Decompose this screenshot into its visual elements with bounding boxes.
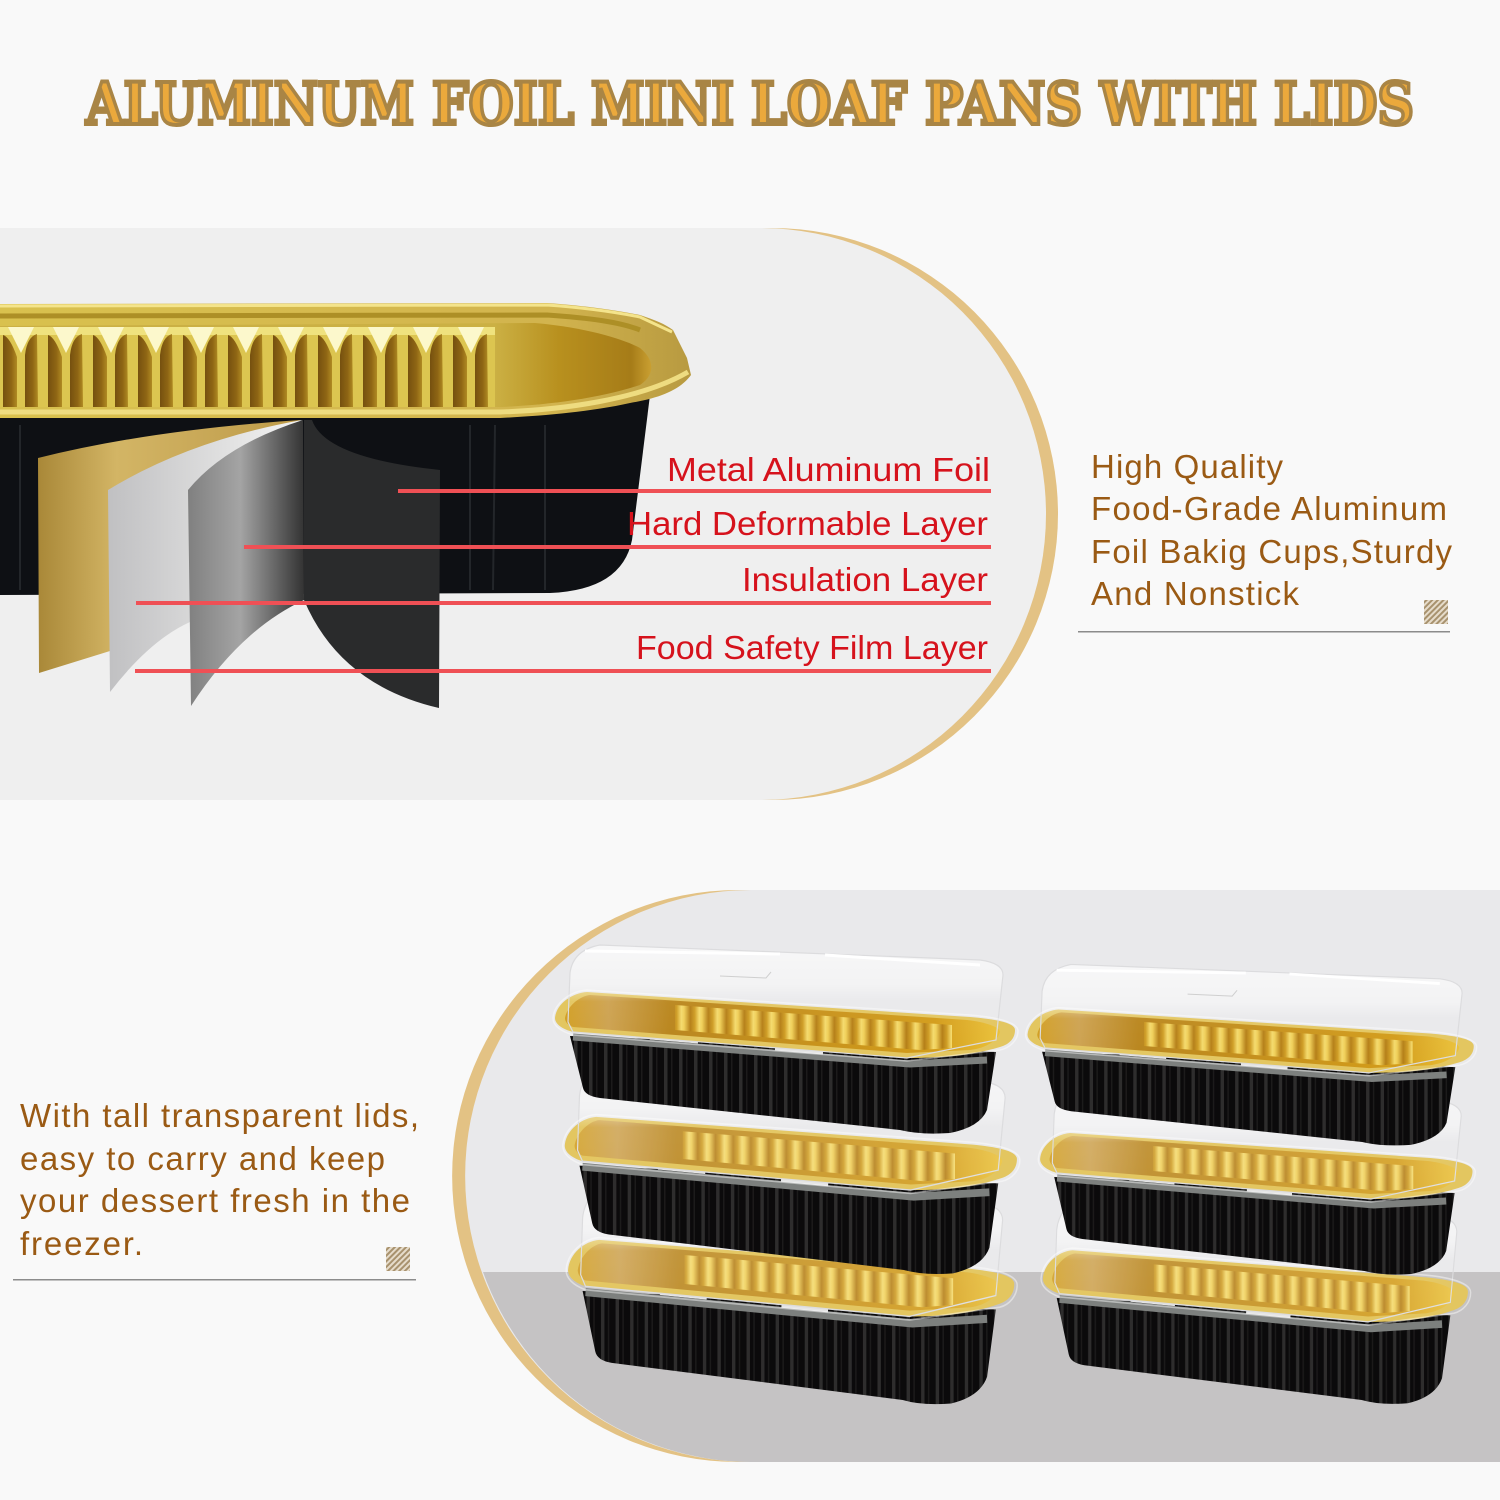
layer: silver <box>108 420 302 692</box>
panel background with gold arc <box>452 890 1500 1462</box>
text block: tall transparent lids <box>20 1097 419 1262</box>
pan: right middle <box>1038 1086 1475 1275</box>
icon: hatched square <box>1424 600 1448 624</box>
text block: tall transparent lids: easy to carry and keep <box>20 1140 385 1177</box>
text block: tall transparent lids: With tall transparent lids, <box>20 1097 419 1134</box>
divider line <box>13 1279 416 1280</box>
callout labels: Insulation Layer <box>742 561 988 598</box>
text block: tall transparent lids: your dessert fresh in the <box>20 1182 410 1219</box>
title: WITH <box>1099 70 1257 138</box>
text block: tall transparent lids: freezer. <box>20 1225 143 1262</box>
diagram: four peeled foil layers <box>38 420 440 708</box>
title: LOAF <box>751 70 907 138</box>
layer: gold <box>38 420 300 673</box>
divider line <box>1078 631 1450 632</box>
layer: gray <box>188 420 304 706</box>
callout labels: Hard Deformable Layer <box>627 505 988 542</box>
pan: right bottom <box>1041 1199 1471 1404</box>
text block: high quality: High Quality <box>1091 448 1284 485</box>
photo: right stack of pans <box>1026 964 1477 1404</box>
text block: high quality <box>1091 448 1452 612</box>
panel background with gold arc <box>0 228 1058 800</box>
callout labels <box>627 451 990 666</box>
pan: left middle <box>563 1065 1020 1274</box>
text block: high quality: And Nonstick <box>1091 575 1300 612</box>
title <box>85 70 1414 138</box>
title: PANS <box>925 70 1082 138</box>
panel: stacked pans <box>452 890 1500 1462</box>
layer: black <box>304 420 440 708</box>
icon: hatched square <box>386 1247 410 1271</box>
pan: right top <box>1026 964 1477 1145</box>
callout labels: Food Safety Film Layer <box>636 629 988 666</box>
photo: left stack of pans <box>553 945 1020 1404</box>
title: LIDS <box>1274 70 1414 138</box>
text block: high quality: Food-Grade Aluminum <box>1091 490 1447 527</box>
photo: close-up of loaf pan <box>0 303 691 595</box>
title: ALUMINUM <box>85 70 414 138</box>
pan: left bottom <box>566 1185 1017 1404</box>
callout labels: Metal Aluminum Foil <box>667 451 990 488</box>
title: MINI <box>591 70 734 138</box>
callout lines <box>135 489 991 673</box>
pan: left top <box>553 945 1018 1134</box>
panel: foil layers <box>0 228 1058 800</box>
text block: high quality: Foil Bakig Cups,Sturdy <box>1091 533 1452 570</box>
title: FOIL <box>432 70 574 138</box>
